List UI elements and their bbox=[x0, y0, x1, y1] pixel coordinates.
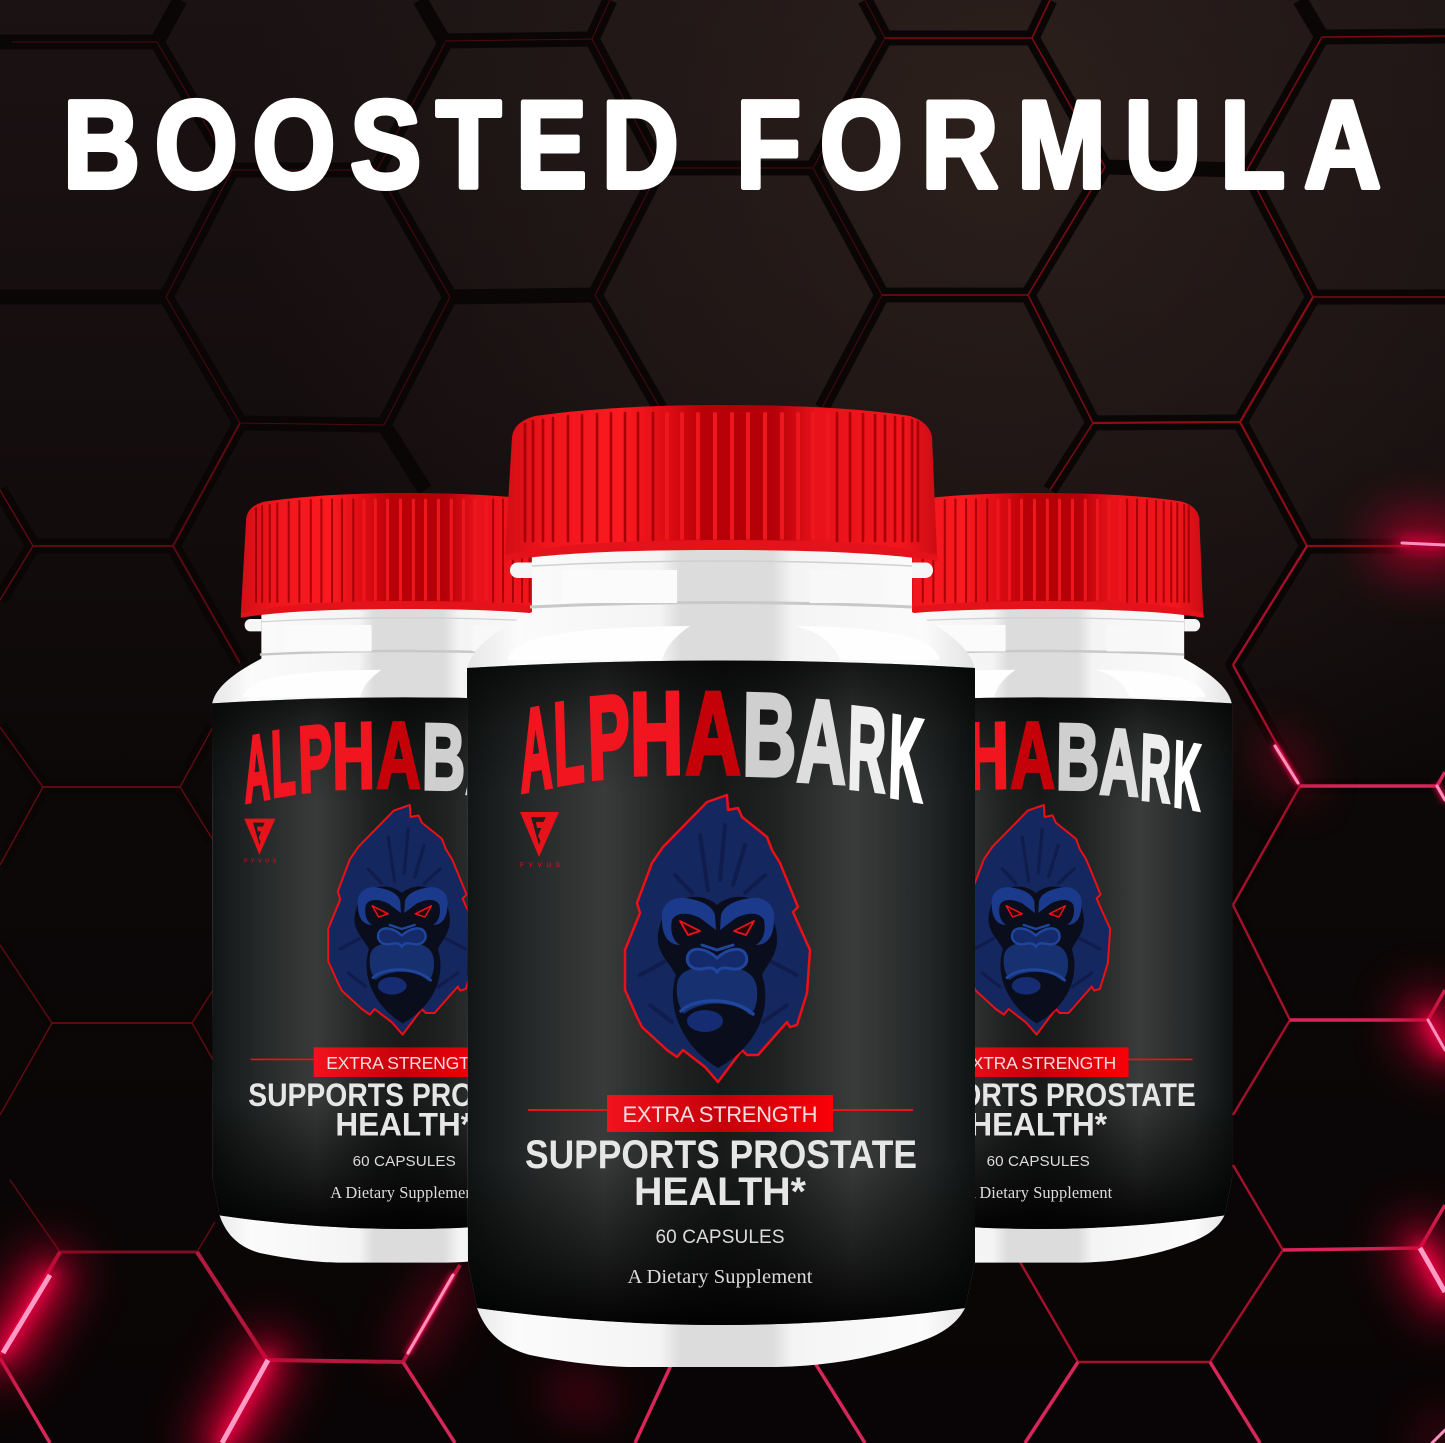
right count and supplement text bbox=[964, 1153, 1113, 1202]
left logo wordmark: K bbox=[537, 722, 571, 828]
left count and supplement text: 60 CAPSULES bbox=[353, 1153, 456, 1170]
right logo wordmark: H bbox=[965, 704, 1009, 809]
left logo wordmark: A bbox=[377, 704, 421, 808]
center logo wordmark: K bbox=[886, 691, 928, 824]
title: BOOSTED bbox=[63, 75, 679, 214]
left logo wordmark: H bbox=[331, 704, 375, 809]
center claim: SUPPORTS PROSTATE bbox=[525, 1133, 917, 1177]
right logo wordmark: B bbox=[1055, 705, 1100, 810]
center logo wordmark: A bbox=[796, 675, 849, 808]
right logo wordmark: A bbox=[874, 717, 906, 823]
left claim bbox=[248, 1077, 562, 1142]
right bottle label artwork bbox=[874, 704, 1205, 1202]
left logo wordmark: A bbox=[465, 710, 507, 815]
neon glows bbox=[3, 543, 1445, 1443]
left logo wordmark: B bbox=[421, 705, 466, 810]
bottle: center bbox=[467, 405, 975, 1367]
left logo wordmark: P bbox=[296, 707, 334, 813]
right logo wordmark: R bbox=[1139, 715, 1174, 821]
left claim: SUPPORTS PROSTATE bbox=[248, 1077, 562, 1113]
bottle: left bbox=[212, 493, 598, 1263]
center logo wordmark: A bbox=[515, 684, 554, 818]
center count and supplement text: A Dietary Supplement bbox=[628, 1266, 813, 1288]
right gorilla bbox=[962, 805, 1110, 1035]
center gorilla bbox=[625, 795, 810, 1082]
center claim bbox=[525, 1133, 917, 1214]
left count and supplement text: A Dietary Supplement bbox=[330, 1183, 479, 1202]
center logo wordmark: L bbox=[549, 678, 586, 811]
right logo wordmark: P bbox=[930, 707, 968, 813]
bottle: right bbox=[846, 493, 1232, 1263]
right claim: HEALTH* bbox=[969, 1106, 1108, 1142]
center logo wordmark: R bbox=[846, 682, 890, 816]
left count and supplement text bbox=[330, 1153, 479, 1202]
center claim: HEALTH* bbox=[634, 1170, 806, 1214]
left bottle label artwork bbox=[240, 704, 571, 1202]
right strength badge: EXTRA STRENGTH bbox=[960, 1053, 1116, 1073]
left strength badge bbox=[251, 1047, 559, 1077]
center bottle shape bbox=[467, 405, 975, 1367]
right count and supplement text: 60 CAPSULES bbox=[987, 1153, 1090, 1170]
left brand mark bbox=[244, 819, 277, 865]
left bottle shape bbox=[212, 493, 598, 1263]
center count and supplement text bbox=[628, 1227, 813, 1288]
right count and supplement text: A Dietary Supplement bbox=[964, 1183, 1113, 1202]
right logo wordmark: A bbox=[1099, 710, 1141, 815]
left logo wordmark: R bbox=[505, 715, 540, 821]
center count and supplement text: 60 CAPSULES bbox=[656, 1227, 784, 1248]
right claim: SUPPORTS PROSTATE bbox=[882, 1077, 1196, 1113]
left claim: HEALTH* bbox=[335, 1106, 474, 1142]
right bottle shape bbox=[846, 493, 1232, 1263]
right strength badge bbox=[885, 1047, 1193, 1077]
title bbox=[63, 75, 1381, 214]
right logo wordmark: K bbox=[1171, 722, 1205, 828]
right logo wordmark: L bbox=[901, 711, 931, 817]
left brand mark: FYVUS bbox=[244, 859, 277, 865]
center logo wordmark: H bbox=[629, 668, 684, 800]
right logo wordmark: A bbox=[1011, 704, 1055, 808]
center logo wordmark: B bbox=[742, 669, 798, 801]
left logo wordmark: L bbox=[267, 711, 297, 817]
center brand mark bbox=[520, 812, 561, 869]
center brand mark: FYVUS bbox=[520, 862, 561, 869]
center strength badge bbox=[528, 1095, 913, 1132]
center logo wordmark: P bbox=[584, 671, 632, 805]
center strength badge: EXTRA STRENGTH bbox=[622, 1102, 818, 1127]
left strength badge: EXTRA STRENGTH bbox=[326, 1053, 482, 1073]
left logo wordmark: A bbox=[240, 717, 272, 823]
right claim bbox=[882, 1077, 1196, 1142]
title: FORMULA bbox=[736, 75, 1381, 214]
center logo wordmark: A bbox=[686, 668, 741, 799]
left gorilla bbox=[328, 805, 476, 1035]
